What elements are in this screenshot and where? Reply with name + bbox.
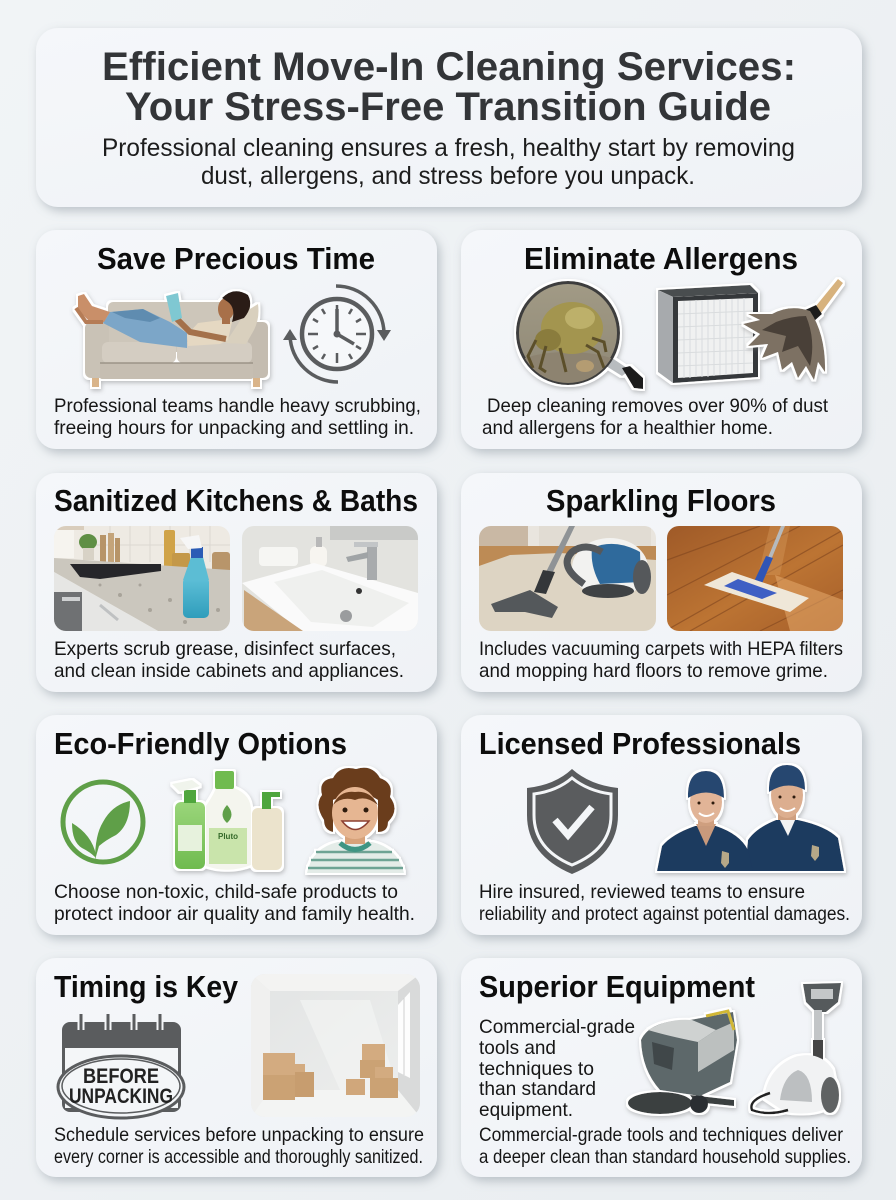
body text: protect indoor air quality and family health. [54,903,415,925]
icon: eco cleaning bottles: Pluto [218,832,238,841]
body text: freeing hours for unpacking and settling in. [54,417,414,439]
photo: bathroom sink [242,526,418,631]
side text: than standard [479,1078,596,1100]
panel: sparkling floors [461,473,862,692]
body text [482,395,829,439]
body text: and allergens for a healthier home. [482,417,773,439]
body text: Deep cleaning removes over 90% of dust [487,395,829,417]
body text: Commercial-grade tools and techniques deliver [479,1124,843,1146]
photo: mop on wood floor [667,526,843,631]
side text: tools and [479,1037,556,1059]
photo: kitchen [54,526,230,631]
icon: two uniformed workers [657,765,844,871]
subtitle: Professional cleaning ensures a fresh, healthy start by removing [102,134,795,162]
body text: and mopping hard floors to remove grime. [479,660,828,682]
heading: Eliminate Allergens [524,241,798,276]
title: Your Stress-Free Transition Guide [125,85,771,129]
icon: eco cleaning bottles [172,771,282,870]
icon: clock with arrows [283,286,391,382]
subtitle: dust, allergens, and stress before you unpack. [201,162,695,190]
body text: Hire insured, reviewed teams to ensure [479,881,805,903]
heading: Timing is Key [54,969,239,1004]
panel: save precious time [36,230,437,449]
body text [479,638,843,682]
panel: eco-friendly options [36,715,437,935]
heading: Superior Equipment [479,969,755,1004]
panel: superior equipment [461,958,862,1177]
body text [54,638,404,682]
icon: floor scrubber [628,1011,737,1114]
body text: Includes vacuuming carpets with HEPA filters [479,638,843,660]
icon: steam cleaner [751,983,841,1114]
photo: vacuum on carpet [479,526,656,631]
icon: before unpacking calendar [58,1014,184,1118]
body text [54,1124,424,1168]
heading: Eco-Friendly Options [54,726,347,761]
icon: before unpacking calendar: UNPACKING [69,1085,173,1108]
icon: feather duster [743,279,843,380]
heading: Sanitized Kitchens & Baths [54,483,418,518]
icon: person reading on sofa [76,291,268,387]
subtitle [102,134,795,190]
panel: header [36,28,862,207]
body text: Choose non-toxic, child-safe products to [54,881,398,903]
photo: empty room with boxes [251,974,420,1117]
side text: techniques to [479,1058,594,1080]
body text: Schedule services before unpacking to ensure [54,1124,424,1146]
side text: equipment. [479,1099,573,1121]
side text: Commercial-grade [479,1016,635,1038]
body text: Experts scrub grease, disinfect surfaces, [54,638,396,660]
side text [479,1016,635,1121]
body text [54,881,415,925]
panel: sanitized kitchens and baths [36,473,437,692]
icon: HEPA filter [658,285,758,383]
heading: Sparkling Floors [546,483,776,518]
icon: dust mite under magnifier [508,281,643,392]
heading: Licensed Professionals [479,726,801,761]
icon: before unpacking calendar: BEFORE [83,1065,159,1088]
body text: every corner is accessible and thoroughly sanitized. [54,1146,423,1168]
panel: timing is key [36,958,437,1177]
panel: eliminate allergens [461,230,862,449]
body text [479,1124,851,1168]
title [102,45,796,129]
icon: leaf badge [63,782,143,862]
icon: shield with check [527,769,618,874]
body text: Professional teams handle heavy scrubbing, [54,395,421,417]
body text: and clean inside cabinets and appliances. [54,660,404,682]
title: Efficient Move-In Cleaning Services: [102,45,796,89]
body text [479,881,850,925]
heading: Save Precious Time [97,241,375,276]
body text: reliability and protect against potential damages. [479,903,850,925]
icon: smiling child [307,768,404,873]
panel: licensed professionals [461,715,862,935]
body text [54,395,421,439]
